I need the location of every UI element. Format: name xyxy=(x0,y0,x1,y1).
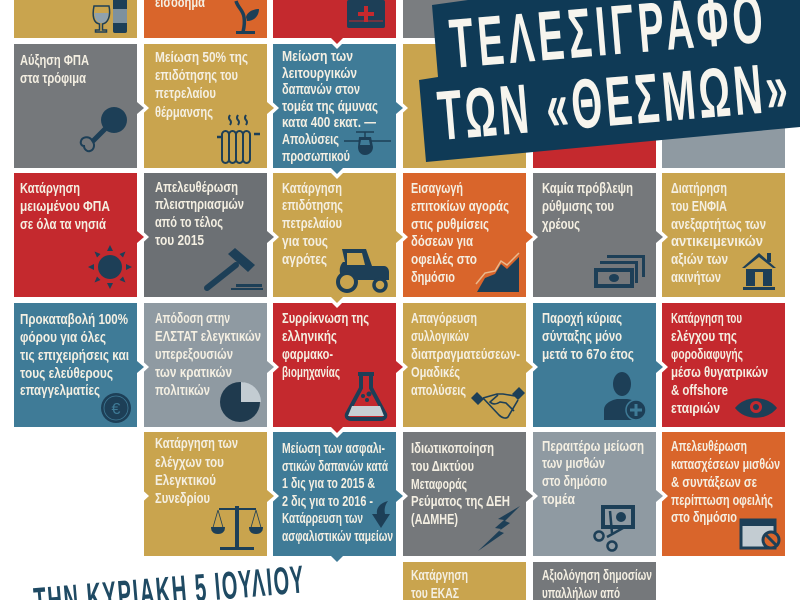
panel: yellow card behind title xyxy=(403,44,526,168)
panel: farmers subsidy xyxy=(273,173,396,297)
text: ADMIE privatisation: Ρεύματος της ΔΕΗ xyxy=(411,493,510,510)
text: tax evasion xyxy=(671,310,768,417)
text: court of audit: Συνεδρίου xyxy=(155,490,210,507)
text: market interest rates: δημόσιο xyxy=(411,269,455,286)
panel: property tax xyxy=(662,173,785,297)
text: auctions: του 2015 xyxy=(155,232,204,249)
icon: gavel xyxy=(207,248,263,290)
text: heating subsidy xyxy=(155,49,248,121)
text: ELSTAT: των κρατικών xyxy=(155,364,232,381)
panel: court of audit xyxy=(144,432,267,556)
text: public wages: των μισθών xyxy=(542,455,605,472)
icon: eye xyxy=(735,398,777,418)
text: auctions xyxy=(155,179,244,249)
text: property tax: αξιών των xyxy=(671,251,728,268)
text: advance tax xyxy=(20,311,129,399)
panel: ADMIE privatisation xyxy=(403,432,526,556)
text: auctions: Απελευθέρωση xyxy=(155,179,238,196)
panel: wage seizures xyxy=(662,432,785,556)
text: advance tax: φόρου για όλες xyxy=(20,329,106,346)
text: court of audit xyxy=(155,435,238,507)
text: property tax: ανεξαρτήτως των xyxy=(671,216,766,233)
text: collective bargaining: Απαγόρευση xyxy=(411,310,477,327)
text: public wages: στο δημόσιο xyxy=(542,473,607,490)
text: tax evasion: φοροδιαφυγής xyxy=(671,346,743,363)
panel: health (top row) xyxy=(273,0,396,38)
icon: lightning xyxy=(478,506,520,551)
panel: advance tax xyxy=(14,303,137,427)
icon: radiator xyxy=(217,115,260,163)
text: property tax: Διατήρηση xyxy=(671,180,727,197)
text: defence spending: τομέα της άμυνας xyxy=(282,98,378,115)
text: collective bargaining xyxy=(411,310,520,399)
text: VAT on food: στα τρόφιμα xyxy=(20,70,87,87)
icon: falling arrow xyxy=(372,501,390,528)
icon: helicopter xyxy=(344,132,391,155)
text: property tax: αντικειμενικών xyxy=(671,233,763,250)
text: pharma: φαρμακο- xyxy=(282,346,333,363)
text: social insurance: 2 δις για το 2016 - xyxy=(282,493,373,510)
text: farmers subsidy: αγρότες xyxy=(282,251,327,268)
text: defence spending: λειτουργικών xyxy=(282,65,357,82)
icon: rising chart xyxy=(476,253,519,292)
icon: plant xyxy=(236,1,259,34)
text: property tax xyxy=(671,180,766,286)
text: islands VAT: σε όλα τα νησιά xyxy=(20,216,107,233)
text: civil servant evaluation xyxy=(542,567,652,600)
text: advance tax: Προκαταβολή 100% xyxy=(20,311,128,328)
panel: public wages xyxy=(533,432,656,556)
text: pension age: μετά το 67ο έτος xyxy=(542,346,634,363)
text: ADMIE privatisation xyxy=(411,440,510,528)
text: court of audit: Κατάργηση των xyxy=(155,435,238,452)
text: social insurance: Μείωση των ασφαλι- xyxy=(282,440,385,457)
text: tax evasion: μέσω θυγατρικών xyxy=(671,364,768,381)
text: advance tax: επαγγελματίες xyxy=(20,382,100,399)
text: ADMIE privatisation: Ιδιωτικοποίηση xyxy=(411,440,494,457)
text: ADMIE privatisation: του Δικτύου xyxy=(411,458,474,475)
text: civil servant evaluation: Αξιολόγηση δημοσίων xyxy=(542,567,652,584)
text: market interest rates xyxy=(411,180,509,286)
text: social insurance: ασφαλιστικών ταμείων xyxy=(282,528,393,545)
text: farmers subsidy: Κατάργηση xyxy=(282,180,342,197)
icon: house xyxy=(742,253,776,290)
text: public wages: Περαιτέρω μείωση xyxy=(542,438,644,455)
text: social insurance: στικών δαπανών κατά xyxy=(282,458,389,475)
text: pharma: βιομηχανίας xyxy=(282,364,340,381)
icon: scales xyxy=(211,506,263,550)
text: social insurance: 1 δις για το 2015 & xyxy=(282,475,375,492)
text: farmers subsidy: πετρελαίου xyxy=(282,215,342,232)
icon: scissors and banknote xyxy=(594,505,635,550)
text: farmers subsidy: για τους xyxy=(282,233,328,250)
text: market interest rates: δόσεων για xyxy=(411,233,474,250)
panel: pension age xyxy=(533,303,656,427)
text: tax evasion: εταιριών xyxy=(671,400,720,417)
text: ELSTAT: ΕΛΣΤΑΤ ελεγκτικών xyxy=(155,328,261,345)
text: debt: ρύθμισης του xyxy=(542,198,614,215)
text: islands VAT xyxy=(20,180,110,233)
text: farmers subsidy: επιδότησης xyxy=(282,197,343,214)
panel: grey card behind title xyxy=(662,44,785,168)
text: debt xyxy=(542,180,633,233)
panel: auctions xyxy=(144,173,267,297)
text: advance tax: τις επιχειρήσεις και xyxy=(20,347,129,364)
icon: sun xyxy=(88,245,132,289)
text: social insurance xyxy=(282,440,393,545)
text: collective bargaining: απολύσεις xyxy=(411,382,466,399)
text: tax evasion: & offshore xyxy=(671,382,728,399)
panel: market interest rates xyxy=(403,173,526,297)
text: wage seizures: & συντάξεων σε xyxy=(671,474,757,491)
text: heating subsidy: Μείωση 50% της xyxy=(155,49,248,66)
text: pension age: σύνταξης μόνο xyxy=(542,328,622,345)
text: defence spending: κατα 400 εκατ. — xyxy=(282,114,376,131)
text: heating subsidy: θέρμανσης xyxy=(155,104,213,121)
icon: chicken leg xyxy=(81,107,127,151)
icon: handshake xyxy=(471,387,525,418)
icon: person with plus xyxy=(604,372,646,420)
text: public wages xyxy=(542,438,644,508)
text: ELSTAT: πολιτικών xyxy=(155,382,210,399)
panel: VAT on food xyxy=(14,44,137,168)
text: ADMIE privatisation: Μεταφοράς xyxy=(411,476,467,493)
text: islands VAT: μειωμένου ΦΠΑ xyxy=(20,198,110,215)
text: tax evasion: Κατάργηση του xyxy=(671,310,742,327)
text: defence spending xyxy=(282,48,378,165)
text: collective bargaining: διαπραγματεύσεων- xyxy=(411,346,520,363)
text: EKAS xyxy=(411,567,468,600)
icon: euro coin: € xyxy=(112,401,121,418)
text: farmers subsidy xyxy=(282,180,343,268)
icon: tractor xyxy=(338,249,389,291)
text: heating subsidy: πετρελαίου xyxy=(155,85,216,102)
text: ELSTAT xyxy=(155,310,261,399)
text: islands VAT: Κατάργηση xyxy=(20,180,80,197)
icon: blocked window xyxy=(741,520,779,548)
text: pharma: Συρρίκνωση της xyxy=(282,310,369,327)
panel: defence spending xyxy=(273,44,396,168)
icon: banknotes xyxy=(594,255,645,288)
panel: heating subsidy xyxy=(144,44,267,168)
text: pension age xyxy=(542,310,634,363)
text: defence spending: Απολύσεις xyxy=(282,131,339,148)
text: wage seizures: στο δημόσιο xyxy=(671,509,737,526)
text: debt: Καμία πρόβλεψη xyxy=(542,180,633,197)
panel: EKAS xyxy=(403,562,526,600)
panel: ELSTAT xyxy=(144,303,267,427)
text: ELSTAT: Απόδοση στην xyxy=(155,310,230,327)
panel: collective bargaining xyxy=(403,303,526,427)
panel: pharma xyxy=(273,303,396,427)
text: defence spending: προσωπικού xyxy=(282,148,350,165)
panel: wine tax (top row) xyxy=(14,0,137,38)
text: auctions: πλειστηριασμών xyxy=(155,196,244,213)
text: court of audit: ελέγχων του xyxy=(155,454,224,471)
panel: debt xyxy=(533,173,656,297)
text: property tax: ακινήτων xyxy=(671,269,721,286)
panel: top row grey xyxy=(403,0,526,38)
text: wage seizures: Απελευθέρωση xyxy=(671,438,747,455)
panel: social insurance xyxy=(273,432,396,556)
text: ADMIE privatisation: (ΑΔΜΗΕ) xyxy=(411,511,458,528)
text: wage seizures xyxy=(671,438,780,526)
panel: islands VAT xyxy=(14,173,137,297)
text: EKAS: Κατάργηση xyxy=(411,567,468,584)
panel: income (top row) xyxy=(144,0,267,38)
text: defence spending: Μείωση των xyxy=(282,48,353,65)
text: collective bargaining: Ομαδικές xyxy=(411,364,460,381)
text: VAT on food: Αύξηση ΦΠΑ xyxy=(20,52,89,69)
text: market interest rates: οφειλές στο xyxy=(411,251,477,268)
icon: first aid kit xyxy=(347,0,385,28)
text: collective bargaining: συλλογικών xyxy=(411,328,469,345)
text: court of audit: Ελεγκτικού xyxy=(155,472,216,489)
text: public wages: τομέα xyxy=(542,491,576,508)
text: auctions: από το τέλος xyxy=(155,214,223,231)
arrows: connectors between cards xyxy=(137,38,668,562)
text: property tax: του ΕΝΦΙΑ xyxy=(671,198,727,215)
text: debt: χρέους xyxy=(542,216,580,233)
title banner xyxy=(419,0,800,162)
icon: wine glass and bottle xyxy=(93,0,127,33)
text: pharma: ελληνικής xyxy=(282,328,337,345)
text: defence spending: δαπανών στον xyxy=(282,81,360,98)
text: tax evasion: ελέγχου της xyxy=(671,328,737,345)
text: social insurance: Κατάρρευση των xyxy=(282,510,363,527)
text: advance tax: τους ελεύθερους xyxy=(20,365,113,382)
icon: pie chart xyxy=(220,382,261,422)
icon: flask xyxy=(347,374,385,419)
text: market interest rates: στις ρυθμίσεις xyxy=(411,216,489,233)
text: ELSTAT: υπερεξουσιών xyxy=(155,346,233,363)
text: pharma xyxy=(282,310,369,381)
panel: civil servant evaluation xyxy=(533,562,656,600)
text: heating subsidy: επιδότησης του xyxy=(155,67,238,84)
text: market interest rates: Εισαγωγή xyxy=(411,180,463,197)
text: market interest rates: επιτοκίων αγοράς xyxy=(411,198,509,215)
text: pension age: Παροχή κύριας xyxy=(542,310,622,327)
text: VAT on food xyxy=(20,52,89,87)
panel: tax evasion xyxy=(662,303,785,427)
panel: red card behind title xyxy=(533,44,656,168)
